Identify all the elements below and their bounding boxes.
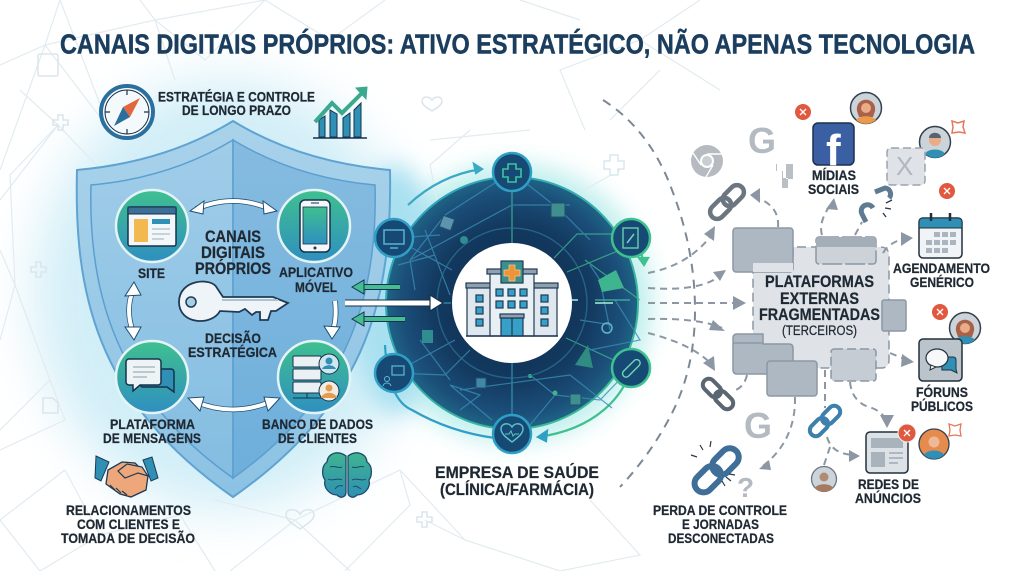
node: mobile app bbox=[278, 190, 350, 262]
label: public forums bbox=[911, 385, 973, 414]
icon: chain lower-left bbox=[700, 376, 736, 412]
icon: X logo bbox=[887, 148, 925, 185]
label: ad networks bbox=[855, 477, 921, 506]
icon: fragment logo bbox=[771, 164, 793, 188]
icon: facebook bbox=[813, 123, 854, 175]
heading: own digital channels bbox=[195, 228, 271, 278]
arrow: app to database bbox=[324, 301, 340, 339]
heading: own digital channels: CANAIS bbox=[205, 228, 261, 246]
avatar: woman forums bbox=[950, 312, 980, 344]
card: top tab bbox=[816, 237, 876, 264]
arrow: messaging to database bbox=[188, 397, 280, 411]
label: customer database: BANCO DE DADOS bbox=[262, 417, 373, 432]
label: loss of control bbox=[653, 503, 787, 546]
icon: key bbox=[179, 282, 288, 321]
card: front bbox=[767, 361, 817, 396]
card: dashed bbox=[831, 349, 876, 381]
label: loss of control: E JORNADAS bbox=[682, 517, 759, 532]
dashed connector arrows bbox=[648, 196, 909, 466]
label: relationships: RELACIONAMENTOS bbox=[66, 503, 191, 518]
icon: break sparks bbox=[691, 441, 735, 486]
background network pattern bbox=[0, 0, 720, 571]
icon node: heart bbox=[493, 415, 531, 453]
icon: broken chain large bbox=[691, 445, 742, 496]
avatar: man ads bbox=[919, 429, 949, 459]
panel label: (TERCEIROS) bbox=[782, 323, 857, 338]
inner halo bbox=[437, 228, 587, 378]
label: ad networks: REDES DE bbox=[858, 477, 919, 492]
label: public forums: PÚBLICOS bbox=[911, 399, 973, 414]
dashed boundary arc bbox=[603, 100, 695, 487]
card: folder bbox=[733, 334, 793, 374]
icon node: pills bbox=[612, 349, 650, 387]
icon: X logo: X bbox=[896, 151, 913, 181]
panel: fragmented external platforms bbox=[733, 228, 906, 396]
label: messaging platform: DE MENSAGENS bbox=[103, 431, 201, 446]
card: top-left bbox=[733, 228, 793, 272]
card: right small bbox=[882, 300, 906, 331]
node: messaging platform bbox=[116, 341, 188, 413]
label: mobile app bbox=[279, 265, 353, 295]
arrowheads bbox=[703, 188, 914, 470]
label: healthcare company: EMPRESA DE SAÚDE bbox=[435, 463, 599, 482]
panel label: PLATAFORMAS bbox=[765, 272, 874, 291]
icon: anger burst bbox=[952, 121, 965, 133]
label: mobile app: APLICATIVO bbox=[279, 265, 353, 280]
icon: compass bbox=[101, 86, 153, 138]
label: generic scheduling: AGENDAMENTO bbox=[893, 261, 990, 276]
icon: anger burst lower bbox=[949, 424, 961, 436]
strategy label: ESTRATÉGIA E CONTROLE bbox=[158, 90, 315, 104]
avatar: woman top bbox=[850, 92, 882, 124]
network hub bbox=[375, 153, 650, 453]
label: loss of control: PERDA DE CONTROLE bbox=[653, 503, 787, 518]
icon: brain bbox=[323, 453, 371, 497]
panel label bbox=[759, 272, 880, 338]
badge: red x bbox=[795, 104, 811, 120]
center white circle bbox=[452, 243, 572, 363]
faint background icons bbox=[31, 54, 442, 529]
label: loss of control: DESCONECTADAS bbox=[668, 531, 774, 546]
label: relationships bbox=[61, 503, 195, 546]
icon: broken chain top bbox=[861, 188, 892, 222]
icon node: monitor bbox=[375, 219, 413, 257]
icon: handshake bbox=[95, 456, 158, 497]
arrows: shield and hub exchange bbox=[345, 280, 443, 326]
icon: chrome logo bbox=[691, 145, 723, 177]
node: site bbox=[116, 190, 188, 262]
strategy label bbox=[158, 90, 315, 118]
label: public forums: FÓRUNS bbox=[916, 385, 968, 400]
icon: ad network bbox=[866, 432, 908, 473]
network lines bbox=[394, 172, 640, 434]
panel label: EXTERNAS bbox=[780, 289, 859, 308]
dark network disc bbox=[386, 177, 638, 429]
icon: hospital bbox=[466, 261, 558, 336]
label: generic scheduling: GENÉRICO bbox=[910, 275, 974, 290]
icon node: clipboard bbox=[612, 219, 650, 257]
panel label: FRAGMENTADAS bbox=[759, 305, 880, 324]
avatar: man top bbox=[920, 126, 950, 158]
label: healthcare company bbox=[435, 463, 599, 499]
arrow: site to app bbox=[190, 201, 277, 214]
icon node: medical cross bbox=[493, 153, 531, 191]
icon: question mark: ? bbox=[737, 472, 754, 503]
label: social media bbox=[808, 168, 859, 197]
badge: red x right bbox=[939, 183, 955, 199]
badge: red x forums bbox=[932, 304, 948, 320]
avatar: small gray bbox=[812, 466, 836, 492]
icon: facebook: f bbox=[826, 126, 841, 175]
label: site: SITE bbox=[138, 266, 165, 281]
label: messaging platform bbox=[103, 417, 201, 446]
icon: chain blue bbox=[807, 403, 843, 439]
icon node: chat person bbox=[375, 354, 413, 392]
label: social media: MÍDIAS bbox=[812, 168, 856, 183]
label: mobile app: MÓVEL bbox=[295, 280, 337, 295]
label: messaging platform: PLATAFORMA bbox=[110, 417, 195, 432]
icon: chain top-left bbox=[707, 182, 747, 222]
heading: own digital channels: DIGITAIS bbox=[201, 244, 265, 262]
background glow bbox=[35, 80, 652, 510]
node: customer database bbox=[278, 341, 350, 413]
icon: forum bbox=[919, 339, 962, 381]
arrow: site to messaging bbox=[125, 282, 141, 340]
label: strategic decision: DECISÃO bbox=[205, 331, 261, 346]
panel: shield bbox=[77, 121, 390, 497]
strategy label: DE LONGO PRAZO bbox=[182, 103, 291, 118]
label: relationships: COM CLIENTES E bbox=[77, 517, 180, 532]
panel corner patch bbox=[753, 263, 793, 272]
label: customer database: DE CLIENTES bbox=[278, 431, 357, 446]
label: relationships: TOMADA DE DECISÃO bbox=[61, 531, 195, 546]
label: healthcare company: (CLÍNICA/FARMÁCIA) bbox=[440, 480, 594, 499]
label: customer database bbox=[262, 417, 373, 446]
badge: red x ads bbox=[898, 424, 916, 442]
icon: growth chart bbox=[313, 87, 367, 138]
label: strategic decision: ESTRATÉGICA bbox=[188, 345, 277, 360]
floating cross bbox=[604, 155, 624, 175]
label: generic scheduling bbox=[893, 261, 990, 290]
ring arrows bbox=[385, 164, 648, 441]
icon: google logo top: G bbox=[748, 120, 776, 161]
network small nodes bbox=[422, 203, 624, 405]
label: ad networks: ANÚNCIOS bbox=[855, 491, 921, 506]
heading: own digital channels: PRÓPRIOS bbox=[195, 259, 271, 278]
label: social media: SOCIAIS bbox=[808, 182, 859, 197]
label: strategic decision bbox=[188, 331, 277, 360]
icon: calendar bbox=[919, 213, 962, 258]
icon: google logo bottom: G bbox=[744, 405, 772, 446]
